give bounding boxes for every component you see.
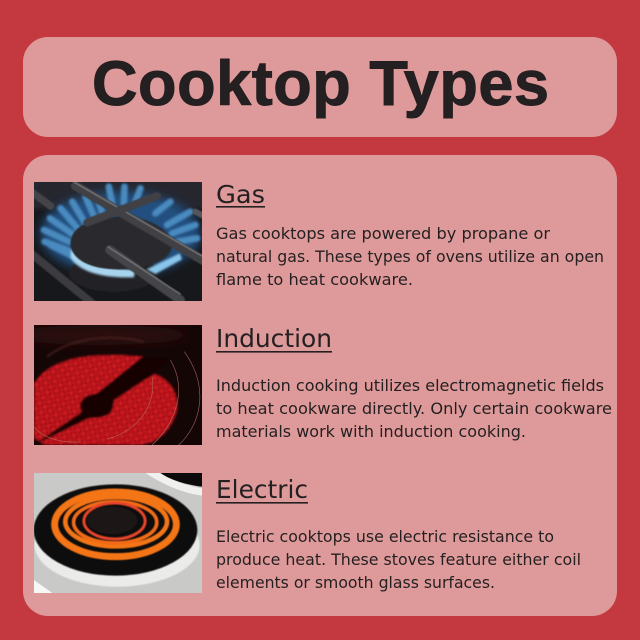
text: electric description: Electric cooktops use electric resistance to (216, 528, 554, 546)
text: electric description (216, 528, 581, 592)
photo: induction element (34, 325, 202, 445)
text: gas description (216, 225, 604, 289)
text: electric description: produce heat. These stoves feature either coil (216, 551, 581, 569)
text: electric description: elements or smooth glass surfaces. (216, 574, 495, 592)
burner cap (71, 217, 172, 269)
heading: induction: Induction (216, 324, 332, 353)
title panel (23, 37, 617, 137)
text: gas description: Gas cooktops are powered by propane or (216, 225, 551, 243)
panel: cooktop types list (14, 155, 617, 616)
burner base (69, 255, 159, 292)
text: induction description (216, 377, 612, 441)
text: induction description: Induction cooking utilizes electromagnetic fields (216, 377, 604, 395)
title: Cooktop Types (92, 49, 549, 119)
text: gas description: flame to heat cookware. (216, 271, 413, 289)
text: induction description: to heat cookware directly. Only certain cookware (216, 400, 612, 418)
grates (33, 182, 204, 303)
heading: electric: Electric (216, 475, 308, 504)
text: gas description: natural gas. These types of ovens utilize an open (216, 248, 604, 266)
text: induction description: materials work with induction cooking. (216, 423, 526, 441)
photo: electric coil (34, 473, 202, 593)
photo: gas burner (34, 182, 202, 301)
heading: gas: Gas (216, 180, 265, 209)
